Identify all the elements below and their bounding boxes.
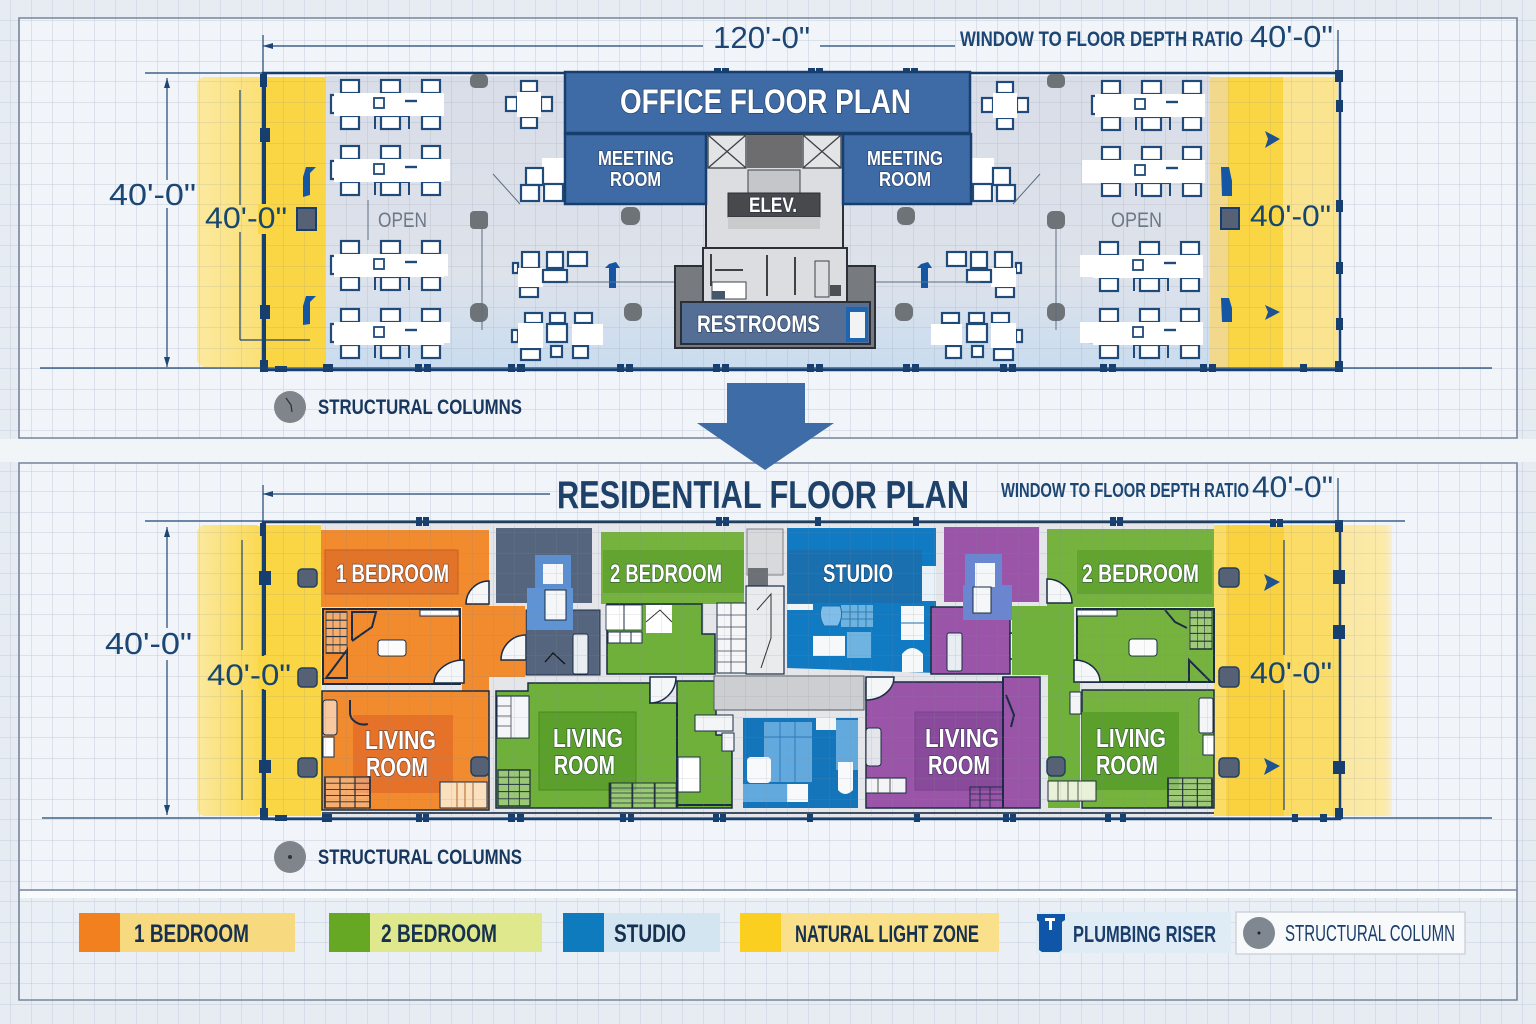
title: OFFICE FLOOR PLAN [620, 83, 911, 121]
unit labels: ROOM [1096, 750, 1158, 780]
title panel [565, 72, 970, 133]
dimensions office [40, 19, 1492, 368]
elevator label: ELEV. [749, 194, 797, 217]
meeting room labels left: MEETING [598, 148, 674, 170]
desks left [331, 80, 450, 358]
columns key office: STRUCTURAL COLUMNS [318, 396, 522, 419]
center corridor [714, 529, 864, 710]
unit labels: ROOM [928, 750, 990, 780]
light zone right [1214, 525, 1392, 816]
depth dimension: 40'-0" [1250, 19, 1333, 54]
exterior wall [258, 68, 1343, 372]
columns key office [274, 391, 522, 423]
unit labels: 1 BEDROOM [336, 560, 449, 588]
legend: structural column [1236, 912, 1465, 954]
meeting room labels left: ROOM [610, 169, 661, 191]
text: open right: OPEN [1111, 209, 1162, 232]
legend: natural light zone [740, 913, 999, 952]
unit labels: 2 BEDROOM [1082, 560, 1199, 588]
panel: office frame [19, 18, 1517, 438]
depth dimension: 40'-0" [1252, 471, 1333, 504]
columns key residential [274, 841, 522, 873]
left inner dimension: 40'-0" [205, 202, 287, 235]
unit: purple [866, 527, 1040, 808]
office floor plan [197, 68, 1343, 372]
unit labels: LIVING [553, 723, 623, 753]
unit: right green [1012, 529, 1214, 808]
legend [79, 912, 1465, 954]
light zone left [197, 525, 323, 816]
meeting room left [565, 134, 706, 204]
unit labels: ROOM [554, 750, 615, 780]
legend: studio [563, 913, 720, 952]
legend: 1 bedroom: 1 BEDROOM [134, 920, 249, 948]
unit labels: LIVING [365, 725, 436, 755]
panel: legend frame [19, 890, 1517, 1000]
right inner dimension: 40'-0" [1250, 200, 1331, 233]
text: open left: OPEN [378, 209, 427, 232]
unit: 1 bedroom orange [321, 530, 526, 810]
window arrows [1264, 574, 1280, 775]
unit labels: ROOM [366, 752, 428, 782]
left inner dimension: 40'-0" [207, 659, 291, 692]
unit: green living [496, 677, 734, 808]
legend: 2 bedroom: 2 BEDROOM [381, 920, 497, 948]
office width dimension: 120'-0" [713, 20, 810, 55]
unit: 2 bedroom middle green [601, 532, 746, 674]
unit labels: LIVING [1096, 723, 1166, 753]
columns key residential: STRUCTURAL COLUMNS [318, 846, 522, 869]
dimensions residential [42, 471, 1492, 818]
panel: residential frame [19, 463, 1517, 890]
small table sets [506, 81, 1028, 360]
unit labels: 2 BEDROOM [610, 560, 722, 588]
window arrows [1265, 131, 1280, 320]
unit labels: STUDIO [823, 560, 893, 588]
slab [321, 522, 1214, 818]
legend: plumbing riser [1036, 912, 1231, 953]
elevator shafts [708, 135, 841, 168]
depth ratio label: WINDOW TO FLOOR DEPTH RATIO [960, 28, 1243, 51]
shaft: gray [496, 528, 600, 675]
residential floor plan [197, 517, 1392, 822]
service core [706, 134, 843, 248]
unit labels: LIVING [925, 723, 999, 753]
exterior wall [258, 517, 1345, 822]
unit: studio [787, 528, 936, 673]
meeting room labels right [867, 148, 943, 191]
faint partition lines [368, 174, 1056, 330]
legend: plumbing riser: PLUMBING RISER [1073, 921, 1216, 947]
transition arrow [697, 383, 834, 470]
restrooms label: RESTROOMS [697, 311, 820, 338]
residential title: RESIDENTIAL FLOOR PLAN [557, 474, 969, 517]
plumbing risers [303, 167, 1232, 325]
unit: lower studio [743, 718, 858, 808]
left outer dimension: 40'-0" [109, 177, 196, 212]
restroom block [675, 248, 875, 348]
columns [298, 568, 1239, 777]
meeting room labels right: MEETING [867, 148, 943, 170]
natural light zone right [1210, 77, 1338, 367]
columns [297, 74, 1239, 322]
desks right [1080, 81, 1205, 358]
meeting room right [843, 134, 971, 204]
right inner dimension: 40'-0" [1250, 657, 1332, 690]
open office floor [325, 76, 1210, 368]
legend: studio: STUDIO [614, 920, 686, 948]
unit labels [336, 560, 1199, 782]
meeting room labels right: ROOM [879, 169, 931, 191]
natural light zone left [197, 77, 325, 367]
meeting room labels left [598, 148, 674, 191]
legend: natural light zone: NATURAL LIGHT ZONE [795, 921, 979, 948]
depth ratio label: WINDOW TO FLOOR DEPTH RATIO [1001, 480, 1249, 502]
left outer dimension: 40'-0" [105, 626, 192, 661]
legend: 2 bedroom [329, 913, 542, 952]
legend: 1 bedroom [79, 913, 295, 952]
